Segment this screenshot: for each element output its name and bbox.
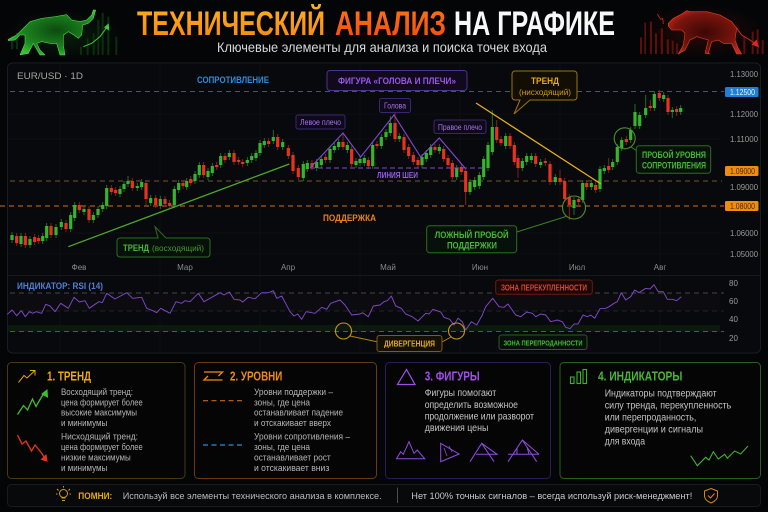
text: resistance: [254, 432, 351, 473]
panel: patterns: [386, 362, 550, 478]
heading: levels: 2. УРОВНИ: [230, 368, 282, 384]
text: indicators: силу тренда, перекупленность: [605, 400, 731, 411]
time axis: Фев: [72, 263, 86, 272]
text: uptrend: высокие максимумы: [61, 408, 137, 418]
callout: uptrend: [117, 227, 210, 257]
text: indicators: или перепроданность,: [605, 412, 696, 423]
text: risk: Нет 100% точных сигналов – всегда используй риск-менеджмент!: [411, 491, 692, 502]
icon: bulb: [56, 486, 71, 500]
legend: resistance dash: [203, 444, 244, 446]
icon: triangle: [398, 370, 415, 384]
price axis: 1.06000: [730, 229, 759, 238]
rsi line: [7, 285, 681, 330]
text: indicators: Индикаторы подтверждают: [605, 389, 717, 400]
panel: chart: [0, 63, 760, 353]
callout: pattern title: ФИГУРА «ГОЛОВА И ПЛЕЧИ»: [338, 76, 456, 86]
text: patterns: [425, 388, 534, 434]
callout: oversold: [499, 335, 587, 350]
text: support: останавливает падение: [254, 408, 343, 418]
title: НА ГРАФИКЕ: [454, 5, 615, 43]
rsi zones: [8, 293, 724, 332]
text: resistance: останавливает рост: [254, 452, 331, 462]
text: downtrend: Нисходящий тренд:: [61, 432, 138, 442]
callout: left shoulder: [296, 115, 345, 129]
heading: trend: 1. ТРЕНД: [47, 368, 92, 384]
text: downtrend: цена формирует более: [61, 442, 143, 452]
callout: right shoulder: [434, 120, 486, 134]
title: [137, 4, 615, 43]
support label: ПОДДЕРЖКА: [323, 213, 376, 223]
callout: downtrend: ТРЕНД: [531, 76, 560, 86]
text: uptrend: [61, 387, 143, 428]
text: resistance: Уровни сопротивления –: [254, 432, 351, 442]
text: uptrend: Восходящий тренд:: [61, 387, 133, 397]
callout: pattern title: [327, 70, 467, 90]
sparkline: [691, 446, 748, 466]
uptrend line: [68, 164, 289, 247]
panel: trend: [8, 362, 185, 478]
text: uptrend: цена формирует более: [61, 398, 143, 408]
icons: pattern shapes: [396, 440, 539, 462]
time axis: Апр: [281, 263, 296, 272]
callout: resistance breakout: [614, 128, 711, 173]
callout: downtrend: [512, 71, 577, 114]
time axis: Июн: [472, 263, 488, 272]
time axis: Авг: [654, 263, 666, 272]
callout: left shoulder: Левое плечо: [300, 118, 342, 127]
callout: uptrend: (восходящий): [152, 243, 204, 253]
candles: green bodies: [12, 94, 681, 245]
label: instrument: EUR/USD · 1D: [17, 71, 83, 82]
callout: false breakout: ПОДДЕРЖКИ: [447, 240, 497, 250]
callout: false breakout: [427, 196, 586, 253]
price axis: 1.12000: [730, 110, 759, 119]
title: АНАЛИЗ: [335, 5, 446, 43]
level 1.09000: [10, 180, 722, 182]
callout: head: [380, 98, 410, 112]
callout: downtrend: (нисходящий): [519, 88, 571, 97]
callout: oversold: ЗОНА ПЕРЕПРОДАННОСТИ: [504, 338, 582, 348]
text: patterns: продолжение или разворот: [425, 412, 534, 422]
time axis: [72, 263, 666, 272]
text: indicators: [605, 389, 731, 447]
rsi axis: 40: [729, 315, 738, 324]
icon: bear: [640, 5, 764, 58]
icon: bull: [5, 10, 122, 60]
callout: uptrend: ТРЕНД: [123, 243, 150, 253]
tag: 1.12500: 1.12500: [730, 88, 755, 97]
text: support: Уровни поддержки –: [254, 387, 334, 397]
support level: [0, 205, 724, 207]
text: patterns: определить возможное: [425, 400, 518, 411]
text: patterns: Фигуры помогают: [425, 388, 497, 399]
resistance level: [10, 90, 724, 92]
indicator title: ИНДИКАТОР: RSI (14): [17, 281, 103, 291]
callout: divergence: ДИВЕРГЕНЦИЯ: [384, 338, 435, 348]
callout: head: Голова: [384, 102, 407, 110]
text: resistance: зоны, где цена: [254, 442, 311, 452]
price axis: 1.05000: [730, 250, 759, 259]
label: neckline: ЛИНИЯ ШЕИ: [377, 171, 418, 180]
price axis: 1.09000: [730, 183, 759, 192]
text: support: [254, 387, 343, 428]
legend: support dash: [203, 400, 244, 402]
callout: right shoulder: Правое плечо: [438, 123, 483, 132]
callout: false breakout: ЛОЖНЫЙ ПРОБОЙ: [435, 229, 509, 240]
price axis: 1.11000: [730, 135, 759, 144]
callout: resistance breakout: ПРОБОЙ УРОВНЯ: [642, 149, 706, 160]
callout: resistance breakout: СОПРОТИВЛЕНИЯ: [642, 160, 706, 170]
subtitle: Ключевые элементы для анализа и поиска точек входа: [217, 39, 547, 55]
icon: shield: [704, 488, 718, 503]
time axis: Мар: [177, 263, 193, 272]
heading: indicators: 4. ИНДИКАТОРЫ: [598, 368, 682, 384]
icon: green up arrow: [18, 390, 48, 414]
callout: divergence: [336, 323, 464, 352]
text: indicators: для входа: [605, 436, 645, 447]
label: remember: ПОМНИ:: [78, 491, 112, 502]
text: patterns: движения цены: [425, 423, 488, 434]
heading: patterns: 3. ФИГУРЫ: [425, 368, 480, 384]
price axis: [725, 70, 759, 259]
text: uptrend: и минимумы: [61, 418, 107, 428]
text: downtrend: низкие максимумы: [61, 452, 131, 462]
tag: 1.09000: 1.09000: [730, 167, 755, 176]
time axis: Июл: [569, 263, 585, 272]
text: downtrend: [61, 432, 143, 473]
panel: footer: [8, 484, 760, 506]
icon: red down arrow: [18, 435, 47, 461]
resistance label: СОПРОТИВЛЕНИЕ: [197, 75, 269, 85]
panel: indicators: [560, 362, 760, 478]
tag: 1.08000: 1.08000: [730, 202, 755, 211]
icon: gold arrow: [18, 370, 35, 382]
text: support: зоны, где цена: [254, 398, 311, 408]
pattern: head and shoulders: [310, 115, 484, 168]
text: support: и отскакивает вверх: [254, 418, 331, 428]
rsi axis: [729, 279, 738, 343]
candles: wicks: [12, 90, 681, 248]
text: downtrend: и минимумы: [61, 463, 107, 473]
rsi axis: 60: [729, 297, 738, 306]
rsi axis: 80: [729, 279, 738, 288]
panel: levels: [194, 362, 376, 478]
time axis: Май: [380, 263, 396, 272]
rsi axis: 20: [729, 334, 738, 343]
icon: bars: [570, 370, 586, 384]
callout: overbought: [496, 280, 592, 294]
text: resistance: и отскакивает вниз: [254, 463, 329, 473]
price axis: 1.13000: [730, 70, 759, 79]
text: remember: Используй все элементы технического анализа в комплексе.: [123, 491, 382, 502]
candles: red bodies: [17, 93, 677, 245]
icon: levels: [204, 372, 222, 380]
text: indicators: дивергенции и сигналы: [605, 424, 703, 435]
downtrend line: [476, 103, 601, 184]
title: ТЕХНИЧЕСКИЙ: [137, 4, 325, 43]
callout: overbought: ЗОНА ПЕРЕКУПЛЕННОСТИ: [501, 284, 587, 292]
